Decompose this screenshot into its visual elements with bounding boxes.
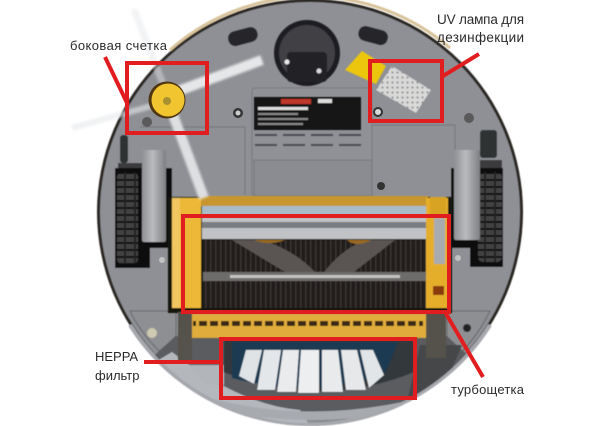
arrow: turbo brush <box>445 312 483 377</box>
label: HEPA filter: фильтр <box>95 368 139 383</box>
right yellow frame <box>426 198 448 308</box>
UV lamp screw <box>374 108 382 116</box>
arrow: UV lamp <box>443 54 479 76</box>
label: HEPA filter: HEPPA <box>95 349 138 364</box>
rear comb bar <box>190 314 426 338</box>
label: UV lamp: UV лампа для <box>437 12 524 27</box>
bottom bumper <box>155 336 466 412</box>
front corners <box>130 311 176 352</box>
top circular caster <box>274 20 340 86</box>
screws <box>142 108 474 263</box>
label: UV lamp: дезинфекции <box>437 30 524 45</box>
UV lamp <box>376 66 431 113</box>
rotating brush <box>203 238 428 308</box>
HEPA filter <box>224 340 414 393</box>
info label <box>254 97 361 146</box>
arrow: side brush <box>105 57 128 105</box>
red box: UV lamp <box>370 61 442 121</box>
main brush assembly <box>168 196 452 362</box>
side slot vents right <box>358 26 388 46</box>
red box: filter <box>221 339 415 398</box>
center module panel <box>252 88 372 196</box>
right wheel <box>451 130 503 267</box>
arrow: filter <box>144 360 221 364</box>
left yellow frame <box>173 198 201 308</box>
warning sticker <box>345 51 386 84</box>
side slot vents left <box>228 26 258 47</box>
label: side brush: боковая счетка <box>70 38 168 53</box>
red box: turbo brush <box>183 216 449 312</box>
left wheel <box>115 135 172 268</box>
red box: side brush <box>127 63 207 133</box>
side brush <box>72 12 262 198</box>
label: turbo brush: турбощетка <box>451 382 525 397</box>
robot vacuum body <box>97 0 523 426</box>
